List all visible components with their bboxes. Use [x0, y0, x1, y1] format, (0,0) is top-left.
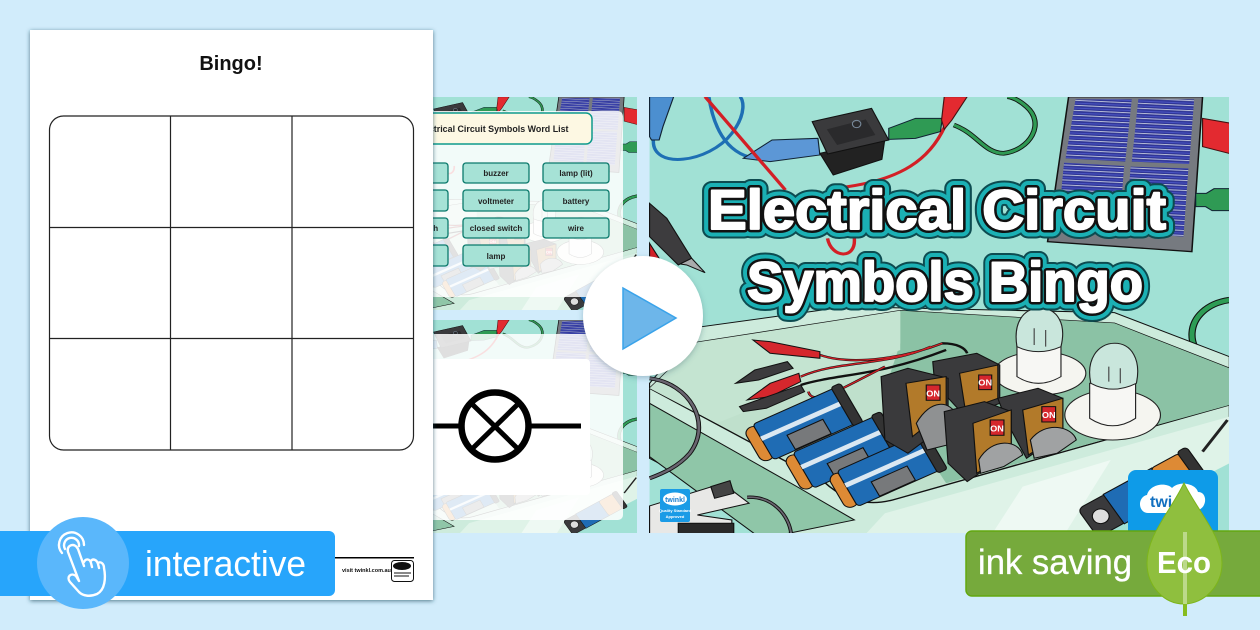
word list buttons: open switch [392, 224, 438, 233]
word list heading [433, 112, 593, 145]
icon: eco leaf: Eco [1157, 545, 1211, 580]
panel: lamp symbol slide [433, 320, 637, 533]
word list buttons: lamp [487, 252, 505, 261]
panel: bingo sheet [30, 30, 433, 600]
title: Electrical Circuit [708, 178, 1166, 241]
play button [583, 256, 703, 376]
label: ink saving: ink saving [978, 543, 1132, 582]
sheet footer [335, 557, 414, 582]
clip: blue top left [650, 97, 674, 140]
panel: twinkl logo [1128, 470, 1218, 540]
clip: red top [942, 97, 967, 129]
batteries [741, 383, 947, 513]
tray [650, 307, 1229, 534]
toggle switches: ON [1042, 411, 1056, 420]
word list buttons: buzzer [483, 169, 509, 178]
clip: blue sleeve [743, 138, 820, 162]
icon: solar panel [1048, 97, 1203, 252]
clip: red right [1203, 118, 1231, 154]
badge: quality approved: Quality Standard [659, 508, 692, 513]
word list heading: Electrical Circuit Symbols Word List [416, 124, 568, 134]
word list buttons: lamp (lit) [559, 169, 593, 178]
sheet footer: visit twinkl.com.au [342, 568, 391, 574]
banner: interactive [0, 517, 335, 609]
battery bottom right [1076, 447, 1210, 540]
panel: twinkl logo: twi [1150, 494, 1172, 511]
word list buttons: closed switch [470, 224, 522, 233]
icon: rocker switch [812, 108, 889, 175]
wire: grey loop [650, 378, 699, 478]
banner: ink saving eco [966, 483, 1260, 616]
title [708, 178, 1166, 313]
badge: quality approved: twinkl [665, 497, 685, 504]
title: Symbols Bingo [747, 250, 1143, 313]
clip: black left [650, 203, 705, 273]
wires: bundle [801, 343, 967, 397]
heading: Bingo: Bingo! [199, 53, 263, 75]
toggle switches: ON [926, 389, 940, 398]
title: Electrical Circuit [708, 178, 1166, 241]
clip: green right [1196, 189, 1231, 211]
toggle switches [881, 353, 1076, 482]
wire: red [705, 97, 946, 254]
croc clip bottom left [650, 481, 749, 534]
bingo grid [50, 116, 414, 450]
word list buttons: voltmeter [478, 197, 514, 206]
icon: eco leaf [1147, 483, 1222, 616]
panel: main slide illustration [650, 97, 1231, 540]
word list buttons: battery [563, 197, 590, 206]
badge: quality approved: Approved [666, 514, 685, 519]
icon: tapping hand [59, 532, 105, 596]
toggle switches: ON [978, 378, 992, 387]
title: Symbols Bingo [747, 250, 1143, 313]
wire: blue [653, 97, 755, 159]
word list buttons [433, 162, 610, 267]
toggle switches: ON [990, 424, 1004, 433]
icon: lamp circuit symbol [433, 392, 581, 460]
title: Electrical Circuit [708, 178, 1166, 241]
panel: word list slide [433, 97, 637, 310]
word list buttons: wire [567, 224, 585, 233]
label: interactive: interactive [145, 543, 306, 584]
crocodile clips [736, 340, 820, 412]
illustration: circuit components in tray [650, 97, 1231, 540]
bulbs [994, 308, 1160, 440]
badge: quality approved [659, 489, 692, 522]
title: Symbols Bingo [747, 250, 1143, 313]
title: Electrical Circuit [708, 178, 1166, 241]
clip: green [889, 118, 942, 139]
title: Symbols Bingo [747, 250, 1143, 313]
wire: green [954, 97, 1035, 153]
